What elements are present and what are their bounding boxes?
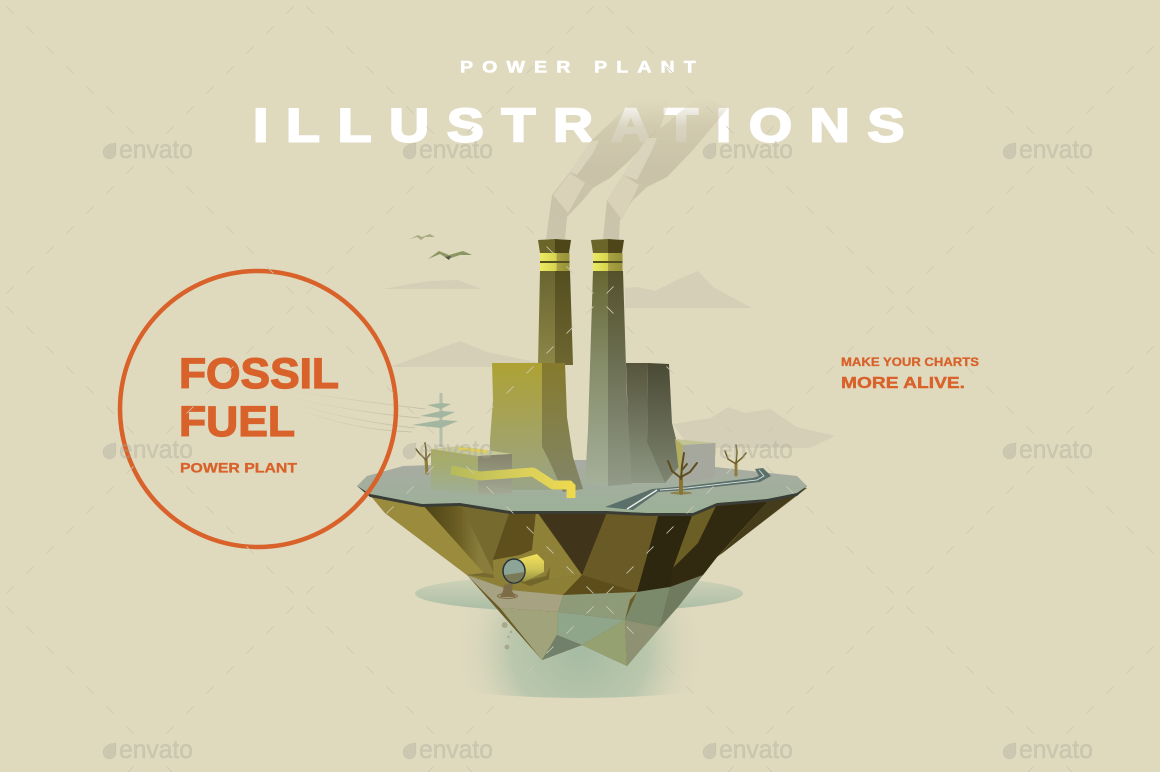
subtitle: POWER PLANT [460, 57, 696, 76]
title: ILLUSTRATIONS [253, 99, 904, 152]
watermarks: envato [1019, 434, 1093, 464]
dead tree: left [416, 443, 430, 473]
water ellipse [415, 575, 743, 612]
watermarks: envato [719, 434, 793, 464]
watermarks [103, 134, 1093, 764]
background mountains [383, 271, 835, 448]
birds [410, 234, 472, 260]
drain pipe [498, 554, 550, 598]
watermarks: envato [119, 734, 193, 764]
pylon [412, 393, 458, 447]
tagline line 1: MAKE YOUR CHARTS [841, 355, 979, 369]
watermarks: envato [1019, 134, 1093, 164]
right building [675, 439, 715, 483]
cooling tower: grey [626, 363, 682, 483]
pollution outflow [500, 582, 516, 597]
bubbles [502, 622, 512, 649]
badge circle [120, 271, 396, 547]
watermarks: envato [419, 134, 493, 164]
smoke plumes [546, 95, 728, 239]
front chimney [585, 239, 632, 486]
watermarks: envato [119, 134, 193, 164]
watermarks: envato [719, 734, 793, 764]
watermarks: envato [419, 434, 493, 464]
wires [285, 390, 425, 432]
large bird [428, 251, 472, 259]
watermarks: envato [119, 434, 193, 464]
glow under the island [455, 608, 705, 698]
watermarks: envato [419, 734, 493, 764]
back chimney [538, 239, 573, 365]
heading: power plant illustrations [253, 57, 904, 152]
watermarks: envato [719, 134, 793, 164]
road [605, 468, 771, 510]
badge text [179, 350, 339, 476]
yellow pipeline [451, 470, 571, 498]
island rim [357, 486, 807, 516]
left building [431, 446, 512, 495]
cooling tower: yellow [490, 363, 583, 492]
submerged facets [467, 575, 703, 666]
watermarks: envato [1019, 734, 1093, 764]
tagline [841, 355, 979, 392]
tagline line 2: MORE ALIVE. [841, 375, 965, 392]
small bird [410, 234, 435, 240]
island underside [370, 488, 807, 666]
fuel: FUEL [179, 398, 295, 446]
dead tree: front [668, 453, 697, 494]
island top surface [357, 460, 807, 513]
dead tree: right [725, 445, 746, 475]
power plant: POWER PLANT [180, 460, 298, 476]
fossil: FOSSIL [179, 350, 339, 398]
